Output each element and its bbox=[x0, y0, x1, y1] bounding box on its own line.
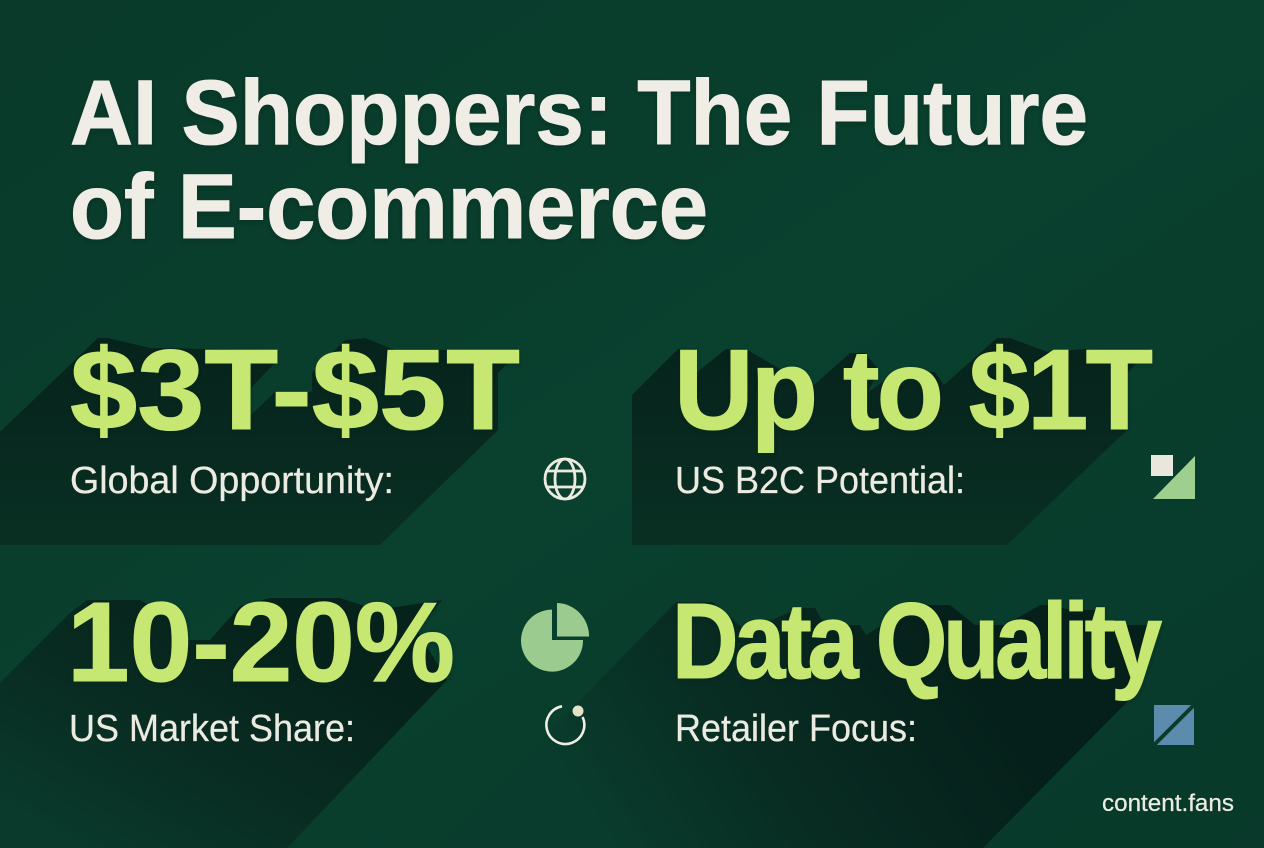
panel: US B2C potential bbox=[674, 327, 1195, 502]
icon: pie chart bbox=[521, 603, 589, 672]
panel: global opportunity bbox=[70, 327, 585, 502]
title: of E-commerce bbox=[70, 156, 708, 258]
long shadow: US market share bbox=[0, 598, 447, 848]
icon: split blue square bbox=[1152, 703, 1196, 747]
icon: globe bbox=[545, 459, 585, 499]
long shadow: global opportunity bbox=[0, 338, 520, 545]
brand credit: content.fans bbox=[1102, 790, 1234, 817]
panel: US market share bbox=[67, 579, 589, 750]
label: US B2C potential: US B2C Potential: bbox=[675, 460, 965, 502]
label: retailer focus: Retailer Focus: bbox=[675, 708, 917, 750]
stat: data quality: Data Quality bbox=[672, 580, 1162, 701]
stat: up to $1T: Up to $1T bbox=[674, 327, 1152, 454]
long shadow: retailer focus bbox=[436, 602, 1158, 848]
stat: $3T-$5T: $3T-$5T bbox=[70, 327, 520, 454]
long shadow: US B2C potential bbox=[632, 338, 1150, 545]
icon: ring with dot bbox=[546, 706, 584, 744]
label: global opportunity: Global Opportunity: bbox=[70, 460, 394, 502]
title: AI Shoppers: The Future bbox=[70, 62, 1088, 164]
label: US market share: US Market Share: bbox=[69, 708, 355, 750]
panel: retailer focus bbox=[672, 580, 1196, 750]
title bbox=[70, 62, 1088, 258]
icon: square and triangle bbox=[1151, 455, 1195, 499]
stat: 10-20%: 10-20% bbox=[67, 579, 455, 705]
